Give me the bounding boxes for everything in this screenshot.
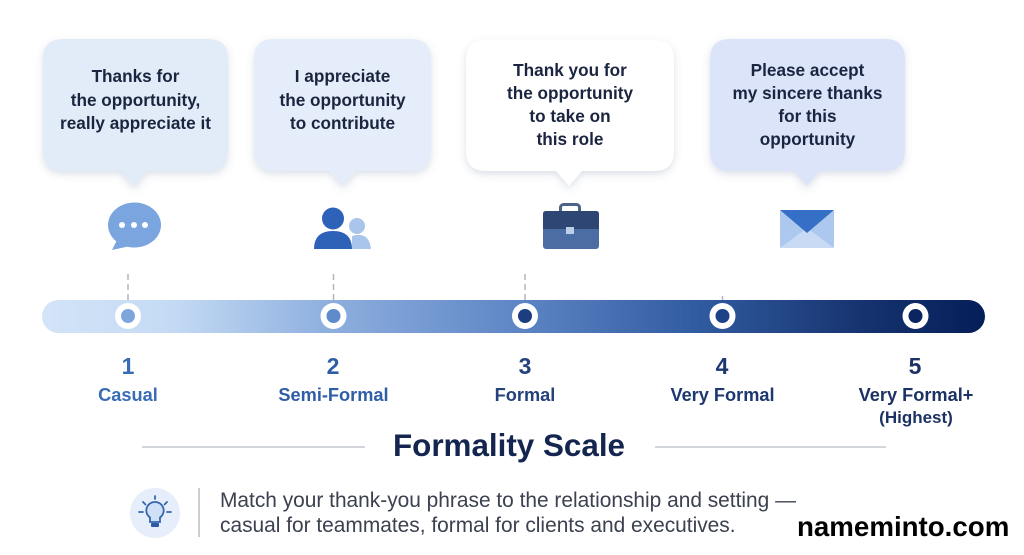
scale connectors: [128, 274, 722, 306]
panel: casual speech bubble: really appreciate it: [60, 113, 211, 133]
watermark: nameminto.com: [797, 511, 1009, 542]
panel: casual speech bubble: [43, 39, 228, 187]
panel: very formal speech bubble: Please accept: [751, 60, 865, 80]
level 1 label: [98, 353, 158, 405]
panel: very formal speech bubble: my sincere thanks: [732, 83, 882, 103]
level 5 label: [859, 353, 973, 427]
panel: very formal speech bubble: opportunity: [760, 129, 856, 149]
level 5 label: Very Formal+: [859, 385, 973, 405]
level 2 label: Semi-Formal: [278, 385, 389, 405]
level 4 label: [670, 353, 775, 405]
panel: formal speech bubble: this role: [537, 129, 603, 149]
panel: semi-formal speech bubble: the opportunity: [279, 90, 406, 110]
panel: formal speech bubble: [466, 40, 674, 186]
level 4 label: Very Formal: [670, 385, 775, 405]
marker 3: [512, 303, 538, 329]
formality gradient bar: [42, 300, 985, 333]
level 3 label: 3: [519, 353, 531, 379]
tip text: Match your thank-you phrase to the relationship and setting —: [220, 489, 796, 512]
title: Formality Scale: [393, 428, 625, 463]
level 5 label: 5: [909, 353, 922, 379]
level 3 label: [495, 353, 555, 405]
tip text: casual for teammates, formal for clients and executives.: [220, 514, 736, 537]
icon: envelope: [780, 210, 834, 248]
marker 1: [115, 303, 141, 329]
panel: casual speech bubble: Thanks for: [92, 66, 180, 86]
panel: formal speech bubble: the opportunity: [507, 83, 633, 103]
level 2 label: 2: [327, 353, 339, 379]
icon: chat bubble: [108, 202, 161, 250]
level 1 label: Casual: [98, 385, 158, 405]
icon: light bulb: [130, 488, 180, 538]
level 3 label: Formal: [495, 385, 555, 405]
level 4 label: 4: [716, 353, 729, 379]
icon: two people: [314, 208, 371, 249]
marker 5: [902, 303, 928, 329]
panel: semi-formal speech bubble: [254, 39, 431, 186]
marker 4: [710, 303, 736, 329]
level 2 label: [278, 353, 389, 405]
icon: briefcase: [543, 204, 599, 249]
level 5 label: (Highest): [879, 408, 953, 427]
panel: very formal speech bubble: [710, 39, 905, 186]
panel: semi-formal speech bubble: to contribute: [290, 113, 395, 133]
panel: semi-formal speech bubble: I appreciate: [295, 66, 390, 86]
panel: very formal speech bubble: for this: [778, 106, 837, 126]
marker 2: [320, 303, 346, 329]
panel: formal speech bubble: to take on: [529, 106, 611, 126]
panel: casual speech bubble: the opportunity,: [71, 90, 200, 110]
panel: formal speech bubble: Thank you for: [513, 60, 627, 80]
level 1 label: 1: [122, 353, 135, 379]
